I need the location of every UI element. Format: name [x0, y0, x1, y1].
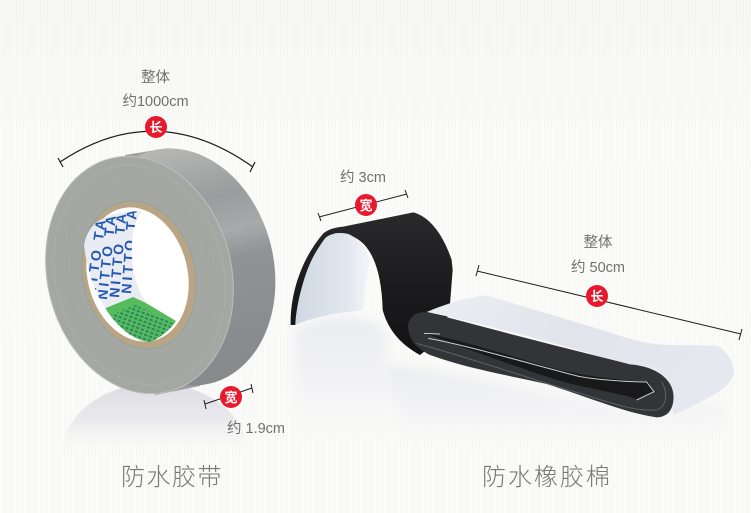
badge: tape length	[145, 116, 167, 138]
badge: foam width: 宽	[359, 198, 373, 213]
badge: tape length: 长	[149, 120, 163, 135]
core printed label: NITTO TAPE	[106, 185, 132, 298]
foam strip	[291, 212, 734, 417]
badge: tape width	[220, 386, 242, 408]
reflection: arch	[295, 318, 395, 450]
label: foam width: 约 3cm	[340, 169, 386, 186]
badge: foam length	[586, 285, 608, 307]
label: tape overall length: 约1000cm	[122, 93, 189, 110]
label: foam overall length: 约 50cm	[571, 259, 625, 276]
title: waterproof rubber foam: 防水橡胶棉	[482, 464, 612, 491]
label: tape overall length	[122, 69, 189, 110]
green label band	[105, 297, 176, 342]
core printed label: NITTO TAPE	[94, 187, 122, 300]
core printed label: NITTO TAPE	[118, 181, 142, 294]
badge: foam length: 长	[590, 289, 604, 304]
bracket: foam length	[476, 265, 742, 340]
arc bracket: tape length	[58, 131, 255, 172]
title: waterproof tape: 防水胶带	[121, 464, 223, 491]
tape roll	[45, 148, 276, 395]
cardboard core	[67, 189, 211, 361]
foam roll end	[408, 312, 674, 417]
core inner white	[73, 196, 202, 353]
core printed label: NITTO TAPE	[81, 191, 113, 304]
core printed label	[84, 211, 176, 342]
label: foam overall length	[571, 234, 625, 276]
label: tape overall length: 整体	[141, 69, 170, 86]
white liner strip	[427, 295, 734, 415]
label: tape width: 约 1.9cm	[227, 420, 285, 437]
reflection: tape	[62, 383, 248, 513]
tape outer side	[63, 128, 300, 406]
bracket: foam width	[318, 190, 408, 221]
label: foam overall length: 整体	[584, 234, 613, 251]
arch inner white side	[295, 233, 370, 325]
tape front face	[21, 136, 258, 414]
badge: tape width: 宽	[224, 390, 238, 405]
badge: foam width	[355, 194, 377, 216]
reflection: foam strip	[385, 365, 726, 451]
bracket: tape width	[204, 384, 253, 409]
black arch	[291, 212, 453, 355]
